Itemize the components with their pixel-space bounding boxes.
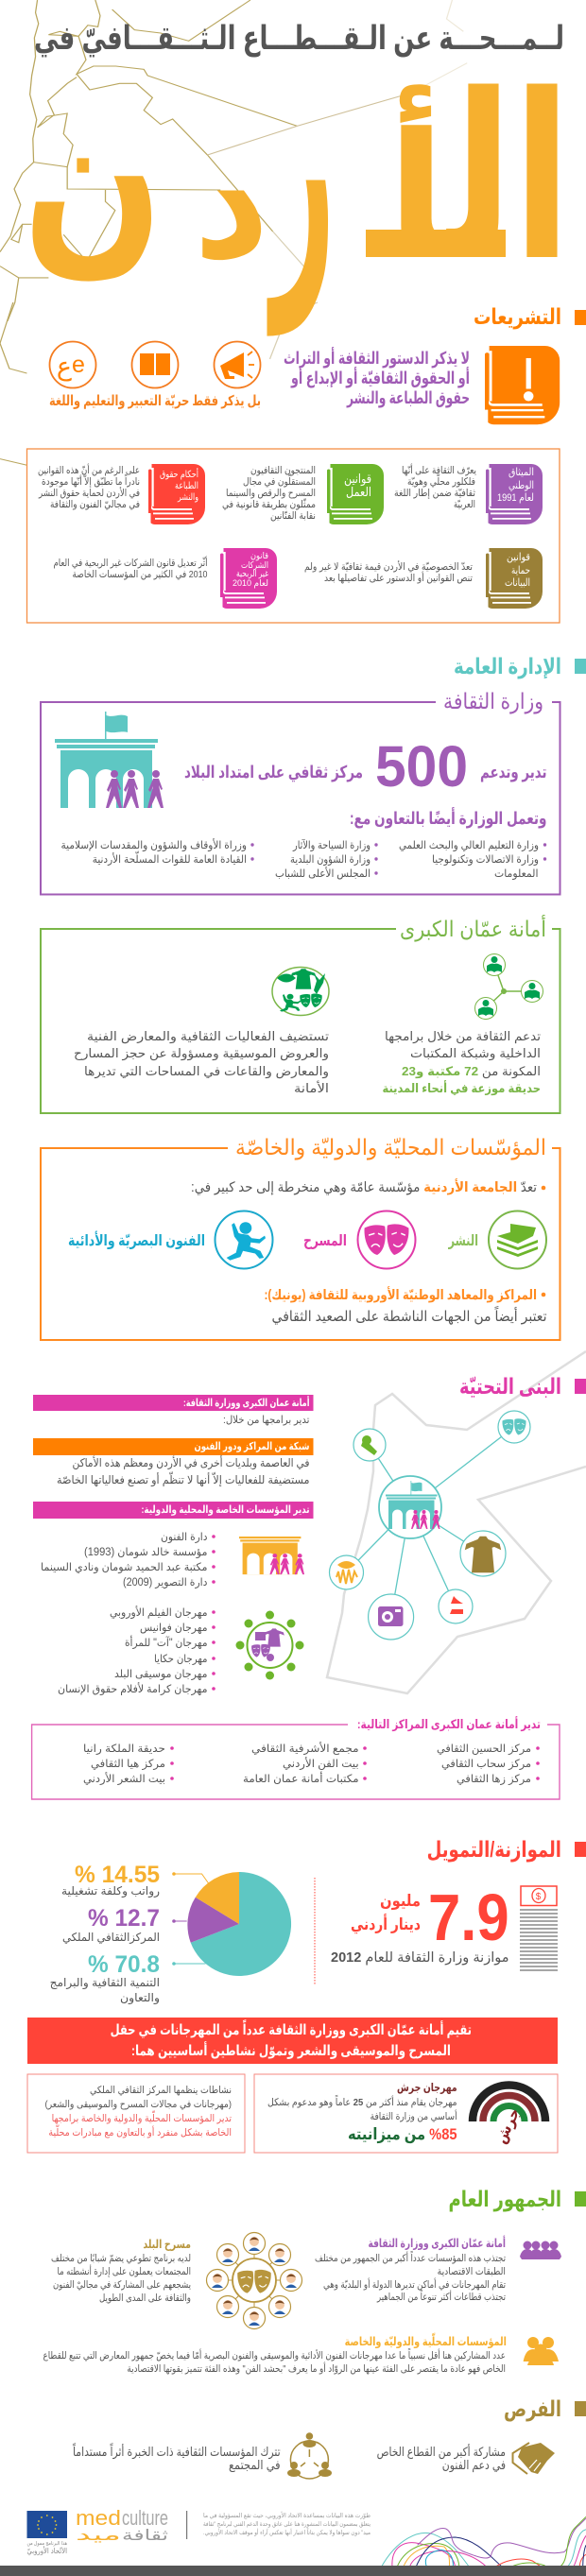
statement: EUNIC: تعتبر أيضاً من الجهات الناشطة على الصعيد الثقافي bbox=[272, 1306, 546, 1326]
text: libraries and parks: المكونة من 72 مكتبة و23 bbox=[402, 1064, 541, 1079]
block: network of centres and art houses bbox=[33, 1438, 314, 1487]
text: libraries and parks: تدعم الثقافة من خلال برامجها bbox=[385, 1029, 541, 1044]
list: centres: حديقة الملكة رانيا bbox=[83, 1743, 165, 1756]
law: data protection: قوانين bbox=[507, 552, 530, 563]
node: eye and sound bbox=[329, 1555, 363, 1589]
stat: 500 cultural centres: مركز ثقافي على امتداد البلاد bbox=[184, 763, 363, 782]
legend: cultural development: التنمية الثقافية والبرامج bbox=[50, 1976, 160, 1990]
legend: salaries bbox=[61, 1862, 209, 1898]
law: national charter: الميثاق bbox=[508, 467, 534, 478]
text: libraries and parks: حديقة موزعة في أنحاء المدينة bbox=[382, 1080, 541, 1095]
icon: orange building bbox=[239, 1537, 304, 1574]
law: copyright: في الأردن لحماية حقوق النشر bbox=[38, 487, 140, 499]
law: national charter: يعرّف الثقافة على أنّها bbox=[402, 463, 476, 476]
big title word: Jordan: ا bbox=[512, 52, 572, 306]
text: libraries and parks: الداخلية وشبكة المكتبات bbox=[410, 1046, 541, 1061]
law: copyright: أحكام حقوق bbox=[160, 468, 198, 480]
banner: festivals funded: تقيم أمانة عمّان الكبرى ووزارة الثقافة عدداً من المهرجانات في حقل bbox=[111, 2019, 472, 2038]
list: partner bodies bbox=[60, 838, 546, 881]
list: festivals: مهرجان الفيلم الأوروبي bbox=[110, 1606, 208, 1620]
law: copyright: في مجاليّ الفنون والثقافة bbox=[50, 499, 140, 510]
law: non-profit companies: الشركات bbox=[241, 560, 268, 571]
list: institutions: دارة الفنون bbox=[161, 1532, 208, 1544]
law: data protection: حماية bbox=[511, 565, 530, 576]
list: festivals: مهرجان موسيقى البلد bbox=[114, 1669, 208, 1681]
logo: med culture: ميد bbox=[76, 2528, 121, 2544]
footer disclaimer: طوّرت هذه البيانات بمساعدة الاتحاد الأوروبي، حيث تقع المسؤولية في ما bbox=[203, 2511, 371, 2519]
panel: amman municipality centres bbox=[32, 1716, 560, 1799]
list: partner bodies: المجلس الأعلى للشباب bbox=[275, 867, 371, 881]
law: copyright: الطباعة bbox=[175, 481, 198, 491]
text: al balad theatre: مسرح البلد bbox=[143, 2238, 191, 2251]
list: partner bodies: وزارة التعليم العالي والبحث العلمي bbox=[399, 840, 539, 852]
icon: ministry building with people bbox=[55, 712, 164, 808]
text: al balad theatre: المجتمعات يعملون على إدارة أنشطته ما bbox=[57, 2264, 191, 2277]
icon: orange crowd bbox=[524, 2337, 559, 2365]
statement: expression, education, language: بل يذكر فقط حريّة التعبير والتعليم واللغة bbox=[49, 393, 261, 409]
text: municipality and ministry audience: أمانة عمّان الكبرى ووزارة الثقافة bbox=[369, 2235, 506, 2250]
logo: jerash arches: جرش bbox=[492, 2105, 524, 2146]
logo: med culture: med bbox=[76, 2506, 121, 2530]
list: festivals: مهرجان فوانيس bbox=[140, 1623, 208, 1635]
big title word: Jordan bbox=[23, 0, 572, 335]
legend: cultural development: 70.8 % bbox=[88, 1951, 160, 1978]
section heading: opportunities: الفرص bbox=[504, 2396, 561, 2422]
panel: laws bbox=[26, 449, 560, 623]
block: private institutions bbox=[33, 1502, 314, 1519]
text: hosting events: تستضيف الفعاليات الثقافية والمعارض الفنية bbox=[87, 1029, 329, 1044]
law: copyright: على الرغم من أنّ هذه القوانين bbox=[38, 463, 140, 476]
text: al balad theatre: والثقافة على المدى الطويل bbox=[99, 2293, 191, 2304]
text: municipality and ministry audience bbox=[315, 2235, 506, 2303]
node: theatre bbox=[498, 1411, 530, 1443]
stat: 500 cultural centres bbox=[184, 734, 546, 799]
list: partner bodies: وزارة السياحة والآثار bbox=[292, 838, 371, 852]
legend: royal cultural centre bbox=[62, 1905, 187, 1945]
icon: purple crowd bbox=[520, 2241, 561, 2259]
panel: royal cultural centre activities bbox=[27, 2074, 245, 2153]
law: non-profit companies: غير الربحية bbox=[236, 569, 268, 579]
text: jerash festival: مهرجان جرش bbox=[397, 2081, 457, 2094]
law: national charter bbox=[394, 463, 543, 524]
text: hosting events: والعروض الموسيقية ومسؤولة عن حجز المسارح bbox=[74, 1046, 329, 1061]
icon: festival ring bbox=[236, 1610, 304, 1680]
law: national charter: الوطني bbox=[508, 480, 534, 491]
stat: ministry budget 7.9 million: دينار أردني bbox=[351, 1914, 421, 1934]
panel: greater amman municipality bbox=[41, 915, 560, 1113]
legend: salaries: رواتب وكلفة تشغيلية bbox=[61, 1884, 160, 1898]
block: private institutions: تدير المؤسسات الخاصة والمحلية والدولية: bbox=[142, 1504, 310, 1516]
law: national charter: فلكلور محلّي وهويّة bbox=[407, 474, 475, 488]
icon and label: visual and performing arts: الفنون البصريّة والأدائية bbox=[68, 1231, 205, 1249]
icon: warning book bbox=[485, 346, 560, 424]
block: amman municipality and ministry: تدير برامجها من خلال: bbox=[223, 1415, 310, 1426]
law: non-profit companies: 2010 في الكثير من المؤسسات الخاصة bbox=[72, 569, 208, 580]
statement: university of jordan: تعدّ الجامعة الأردنية مؤسّسة عامّة وهي منخرطة إلى حد كبير في: bbox=[191, 1178, 537, 1195]
hub: building bbox=[379, 1476, 441, 1538]
icon and label: theatre bbox=[303, 1211, 416, 1268]
logo: med culture bbox=[76, 2506, 168, 2544]
law: non-profit companies: قانون bbox=[250, 551, 268, 561]
logo: jerash arches bbox=[473, 2085, 545, 2146]
divider bbox=[314, 1878, 316, 1984]
stat: ministry budget 7.9 million: مليون bbox=[380, 1892, 421, 1911]
panel: royal cultural centre activities: تدير المؤسسات المحلّية والدولية والخاصة برامجها bbox=[52, 2111, 232, 2124]
legend: royal cultural centre: 12.7 % bbox=[88, 1905, 160, 1932]
text: private sector participation bbox=[377, 2444, 506, 2473]
text: jerash festival bbox=[267, 2081, 457, 2144]
logo: european union: الاتّحاد الأوروبيّ bbox=[26, 2546, 67, 2555]
icon: megaphone bbox=[214, 342, 261, 387]
text: jerash festival: أساسي من وزارة الثقافة bbox=[371, 2109, 457, 2122]
law: labour: المنتجون الثقافيون bbox=[250, 465, 316, 476]
panel: local, international and private institutions bbox=[41, 1135, 560, 1340]
constitution statement: حقوق الطباعة والنشر bbox=[346, 388, 470, 408]
text: al balad theatre: يشجعهم على المشاركة في مجاليْ الفنون bbox=[53, 2279, 191, 2291]
panel: royal cultural centre activities: نشاطات ينظمها المركز الثقافي الملكي bbox=[90, 2085, 232, 2096]
footer disclaimer: يتعلق بمضمون البيانات المنشورة هنا على عاتق وحدة الدعم الفني لبرنامج "ثقافة bbox=[203, 2521, 371, 2528]
text: private sector participation: في دعم الفنون bbox=[442, 2458, 506, 2473]
block: amman municipality and ministry: أمانة عمان الكبرى ووزارة الثقافة: bbox=[183, 1396, 310, 1409]
footer bar bbox=[0, 2566, 586, 2576]
law: copyright: نادراً ما تطبّق إلاّ أنّها موجودة bbox=[42, 474, 140, 488]
icon: languages: ع bbox=[57, 352, 72, 382]
stat: ministry budget 7.9 million: موازنة وزارة الثقافة للعام 2012 bbox=[331, 1950, 509, 1966]
node: dress bbox=[460, 1531, 506, 1576]
list: centres bbox=[83, 1742, 540, 1786]
logo: european union bbox=[26, 2511, 67, 2555]
section heading: public administration: الإدارة العامة bbox=[454, 654, 561, 679]
law: non-profit companies: لعام 2010 bbox=[233, 578, 268, 589]
list: centres: مركز زها الثقافي bbox=[457, 1774, 531, 1786]
panel heading: المؤسّسات المحليّة والدوليّة والخاصّة bbox=[235, 1135, 546, 1160]
law: labour: المستقلّون في مجال bbox=[243, 474, 316, 488]
panel heading: أمانة عمّان الكبرى bbox=[400, 915, 546, 942]
text: municipality and ministry audience: تجتذب قطاعات أكثر تنوعاً من الجماهير bbox=[376, 2290, 506, 2303]
panel: royal cultural centre activities: الخاصة بشكل منفرد أو بالتعاون مع مبادرات محلّية bbox=[48, 2125, 232, 2138]
icon: audience around theatre masks bbox=[206, 2232, 302, 2328]
icon: languages: e bbox=[72, 352, 85, 378]
list: partner bodies: وزارة الاتصالات وتكنولوجيا bbox=[432, 854, 539, 867]
constitution statement bbox=[284, 347, 470, 408]
text: al balad theatre: لديه برنامج تطوعي يضمّ شبابًا من مختلف bbox=[51, 2253, 191, 2264]
icon and label: theatre: المسرح bbox=[303, 1233, 347, 1249]
law: data protection bbox=[304, 548, 543, 609]
list: centres: مركز الحسين الثقافي bbox=[437, 1743, 531, 1756]
text: private institutions audience: المؤسسات المحلّية والدوليّة والخاصة bbox=[345, 2332, 507, 2348]
panel: royal cultural centre activities: (مهرجانات في مجالات المسرح والموسيقى والشعر) bbox=[45, 2099, 232, 2110]
legend: cultural development: والتعاون bbox=[120, 1991, 160, 2005]
banner: festivals funded: المسرح والموسيقى والشعر وتموّل نشاطين أساسيين هما: bbox=[131, 2041, 451, 2059]
law: data protection: تنص القوانين أو الدستور على تفاصيلها بعد bbox=[324, 571, 473, 584]
list: centres: مركز هيا الثقافي bbox=[91, 1759, 165, 1771]
law: labour bbox=[222, 464, 384, 524]
node: music bbox=[353, 1429, 386, 1461]
pie chart: budget breakdown bbox=[50, 1862, 291, 2005]
legend: salaries: 14.55 % bbox=[75, 1862, 160, 1888]
node: gramophone bbox=[439, 1589, 473, 1623]
icon: open book bbox=[132, 342, 178, 387]
list: centres: مركز سحاب الثقافي bbox=[441, 1759, 531, 1771]
icon: community circle bbox=[287, 2432, 332, 2479]
block: amman municipality and ministry bbox=[33, 1395, 314, 1426]
icon: library network bbox=[474, 954, 543, 1019]
text: jerash festival: مهرجان يقام منذ أكثر من 25 عاماً وهو مدعوم بشكل bbox=[267, 2095, 457, 2108]
text: private institutions audience bbox=[43, 2332, 507, 2375]
statement: EUNIC bbox=[265, 1286, 546, 1326]
law: data protection: البيانات bbox=[505, 577, 530, 589]
big title word: Jordan: د bbox=[194, 112, 269, 291]
panel heading: وزارة الثقافة bbox=[443, 689, 543, 714]
constitution statement: لا يذكر الدستور الثقافة أو التراث bbox=[284, 347, 470, 369]
law: national charter: ثقافيّة ضمن إطار اللغة bbox=[394, 488, 475, 499]
list: centres: بيت الفن الأردني bbox=[283, 1757, 359, 1771]
law: labour: العمل bbox=[346, 485, 371, 499]
constitution statement: أو الحقوق الثقافيّة أو الإبداع أو bbox=[290, 367, 470, 388]
law: copyright: والنشر bbox=[177, 492, 198, 503]
law: labour: نقابة الفنّانين bbox=[270, 510, 316, 522]
law: non-profit companies: أثّر تعديل قانون الشركات غير الربحية في العام bbox=[53, 556, 208, 569]
legend: cultural development bbox=[50, 1951, 206, 2005]
footer disclaimer: ميد" دون سواها ولا يمكن بتاتاً اعتبار أنها تعكس آراء أو موقف الاتحاد الأوروبي. bbox=[203, 2528, 371, 2536]
text: lasting impact: في المجتمع bbox=[229, 2458, 281, 2473]
law: national charter: لعام 1991 bbox=[497, 492, 534, 504]
law: non-profit companies bbox=[53, 548, 277, 609]
logo: european union: هذا البرنامج ممول من bbox=[26, 2541, 67, 2547]
text: lasting impact bbox=[73, 2443, 281, 2473]
text: hosting events bbox=[74, 1029, 329, 1095]
section heading: legislation: التشريعات bbox=[474, 304, 561, 330]
block: network of centres and art houses: مستضيفة للفعاليات إلاّ أنها لا تنظّم أو تصنع فعالياتها الخاصّة bbox=[57, 1470, 310, 1487]
list: partner bodies: وزراة الأوقاف والشؤون والمقدسات الإسلامية bbox=[60, 838, 247, 852]
law: labour: ممثّلون بطريقة قانونية في bbox=[222, 498, 316, 510]
law: labour: قوانين bbox=[344, 472, 371, 487]
icon: languages bbox=[49, 342, 96, 387]
list: partner bodies: المعلومات bbox=[494, 868, 539, 881]
big title word: Jordan: ل‍ bbox=[445, 52, 513, 306]
icon: banknote stack bbox=[520, 1886, 558, 1970]
text: municipality and ministry audience: الطبقات الاقتصادية bbox=[438, 2266, 506, 2277]
stat: 500 cultural centres: تدير وتدعم bbox=[480, 763, 546, 782]
stat: ministry budget 7.9 million bbox=[331, 1880, 509, 1966]
block: network of centres and art houses: شبكة من المراكز ودور الفنون bbox=[195, 1441, 310, 1452]
footer disclaimer bbox=[186, 2511, 371, 2539]
text: private institutions audience: الخاص فهو عادة ما يقتصر على الفئة عينها من الروّاد أو ما يعرف "بحشد الفن" وهذه الفئة تتميز بقوتها الاقتصادية bbox=[127, 2361, 506, 2375]
banner: festivals funded bbox=[27, 2018, 558, 2064]
icon: arts medallion bbox=[272, 968, 329, 1015]
text: municipality and ministry audience: تجتذب هذه المؤسسات عدداً أكبر من الجمهور من مختلف bbox=[315, 2251, 506, 2264]
block: network of centres and art houses: في العاصمة وبلديات أخرى في الأردن ومعظم هذه الأماكن bbox=[72, 1455, 310, 1470]
list: festivals: مهرجان كرامة لأفلام حقوق الإنسان bbox=[58, 1682, 208, 1696]
list: institutions: مؤسسة خالد شومان (1993) bbox=[84, 1547, 208, 1559]
panel heading: تدير أمانة عمان الكبرى المراكز التالية: bbox=[357, 1716, 541, 1731]
list: partner bodies: القيادة العامة للقوات المسلّحة الأردنية bbox=[93, 850, 247, 867]
stat: 500 cultural centres: 500 bbox=[375, 734, 468, 799]
panel: ministry of culture bbox=[41, 689, 560, 894]
icon: banknote stack: $ bbox=[536, 1892, 542, 1902]
diagram: cultural venue network on the map bbox=[329, 1411, 530, 1640]
panel: jerash festival bbox=[254, 2074, 558, 2153]
list: centres: بيت الشعر الأردني bbox=[83, 1772, 165, 1786]
icon and label: publishing: النشر bbox=[448, 1233, 478, 1249]
node: camera bbox=[369, 1594, 414, 1640]
list: centres: مجمع الأشرفية الثقافي bbox=[251, 1742, 359, 1756]
map of Jordan: infrastructure background bbox=[327, 1351, 586, 1693]
law: labour: المسرح والرقص والسينما bbox=[226, 488, 316, 499]
stat: ministry budget 7.9 million: 7.9 bbox=[428, 1880, 509, 1954]
list: institutions: دارة التصوير (2009) bbox=[123, 1577, 208, 1589]
list: festivals bbox=[58, 1606, 215, 1696]
list: centres: مكتبات أمانة عمان العامة bbox=[243, 1771, 359, 1785]
law: data protection: تعدّ الخصوصيّة في الأردن قيمة ثقافيّة لا غير ولم bbox=[304, 560, 473, 573]
text: al balad theatre bbox=[51, 2238, 191, 2304]
list: partner bodies: وزارة الشؤون البلدية bbox=[290, 854, 371, 867]
icon: handshake bbox=[512, 2443, 555, 2474]
list: institutions bbox=[41, 1532, 215, 1589]
list: institutions: مكتبة عبد الحميد شومان ونادي السينما bbox=[41, 1562, 208, 1574]
decorative coloured lines bbox=[381, 2516, 586, 2567]
big title word: Jordan: ‍أ bbox=[387, 84, 454, 294]
text: lasting impact: تترك المؤسسات الثقافية ذات الخبرة أثراً مستداماً bbox=[73, 2443, 281, 2460]
text: hosting events: الأمانة bbox=[294, 1080, 329, 1095]
law: copyright bbox=[38, 463, 205, 524]
map of the region (background line art) bbox=[0, 0, 467, 465]
logo: med culture: ثقافة bbox=[122, 2528, 168, 2544]
text: municipality and ministry audience: تقام المهرجانات في أماكن تديرها الدولة أو البلديّة وهي bbox=[323, 2277, 506, 2291]
list: festivals: مهرجان "آت" للمرأة bbox=[125, 1635, 208, 1650]
text: jerash festival: %85 من ميزانيته bbox=[348, 2125, 457, 2144]
icon and label: publishing bbox=[448, 1211, 546, 1268]
law: national charter: العربيّة bbox=[454, 499, 475, 510]
icon and label: visual and performing arts bbox=[68, 1211, 272, 1268]
text: private institutions audience: عدد المشاركين هنا أقل نسبياً ما عدا مهرجانات الفنون الأدائية والموسيقى والفنون البصرية أمّا فيما يخصّ جمهور المعارض التي تتبع للقطاع bbox=[43, 2348, 506, 2361]
logo: med culture: culture bbox=[122, 2506, 168, 2530]
legend: royal cultural centre: المركزالثقافي الملكي bbox=[62, 1931, 160, 1945]
list: festivals: مهرجان حكايا bbox=[154, 1654, 208, 1666]
text: libraries and parks bbox=[382, 1029, 541, 1095]
big title word: Jordan: ن bbox=[23, 69, 164, 291]
text: private sector participation: مشاركة أكبر من القطاع الخاص bbox=[377, 2444, 506, 2460]
text: hosting events: والمعارض والقاعات في المساحات التي تديرها bbox=[84, 1064, 329, 1079]
